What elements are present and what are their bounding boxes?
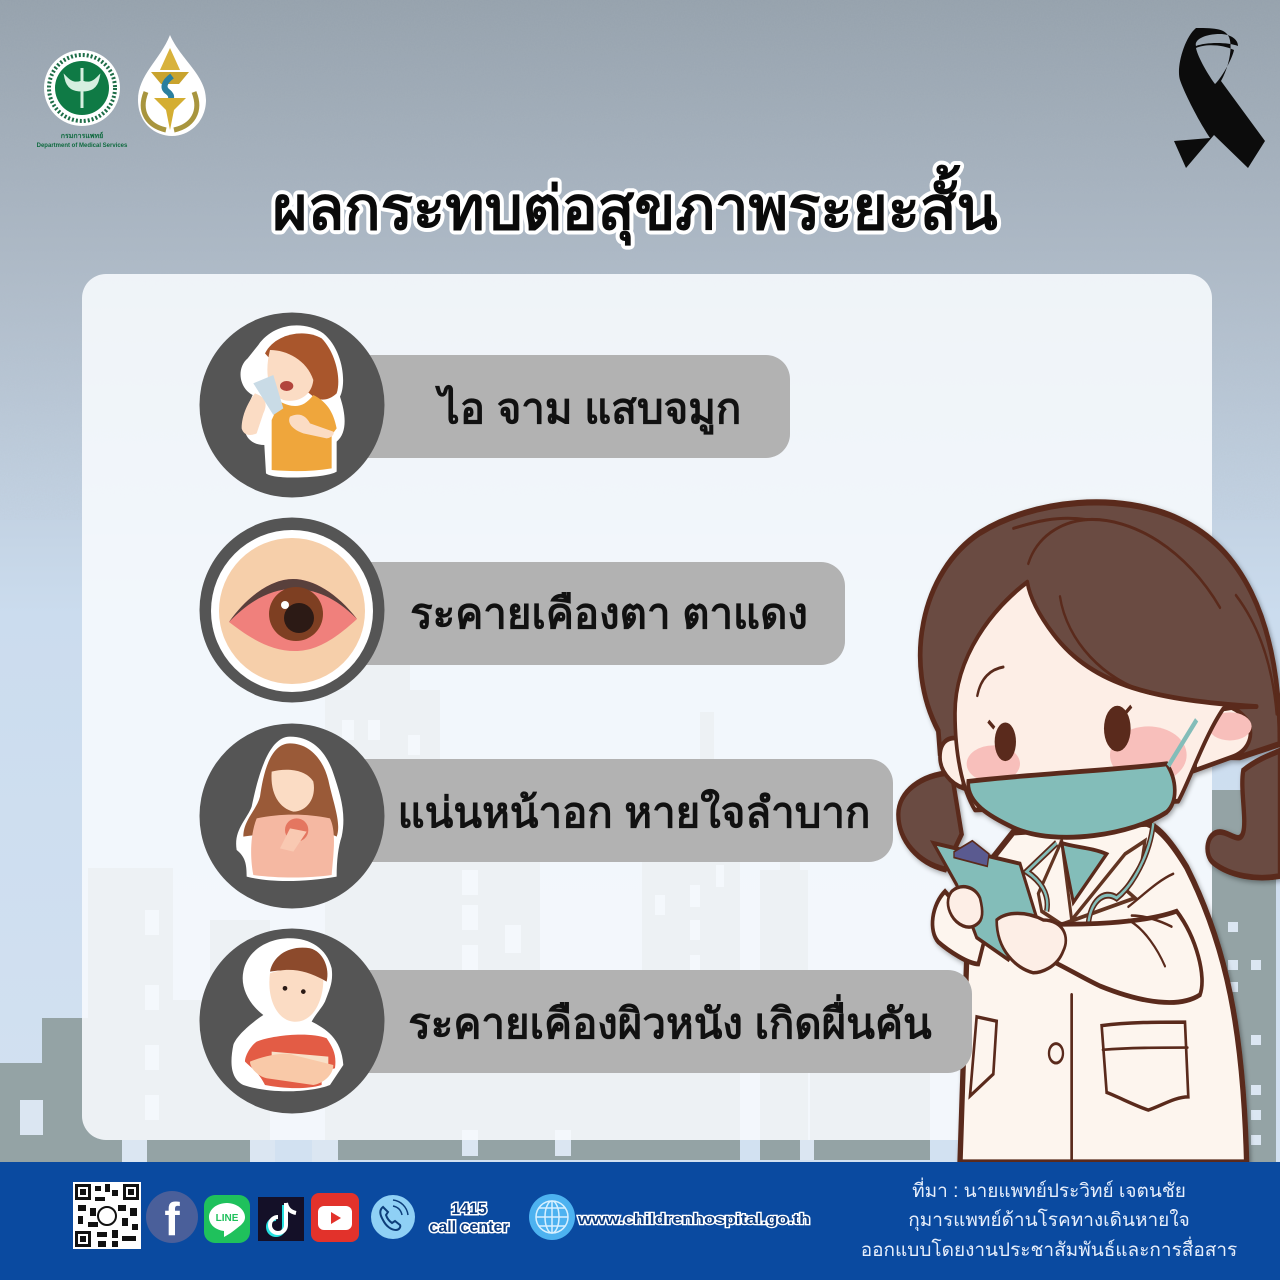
chest pain bbox=[285, 818, 308, 842]
row 4 bbox=[200, 928, 972, 1114]
sleeve folds bbox=[1128, 874, 1173, 966]
label: ไอ จาม แสบจมูก bbox=[435, 384, 741, 435]
face bbox=[267, 350, 313, 401]
left cuff and sleeve bbox=[933, 891, 985, 964]
stethoscope bbox=[1027, 823, 1153, 924]
badge bbox=[200, 518, 384, 702]
row 3 bbox=[200, 724, 893, 908]
icon: LINE bbox=[204, 1195, 250, 1243]
row 2 bbox=[200, 518, 845, 702]
right ear blush bbox=[1208, 712, 1252, 740]
icon: coughing girl bbox=[241, 325, 345, 478]
hair lines bbox=[977, 518, 1277, 714]
QR code bbox=[73, 1182, 141, 1249]
icon: woman with chest tightness bbox=[236, 737, 343, 881]
icon: TikTok bbox=[258, 1197, 304, 1241]
left hand bbox=[948, 887, 982, 927]
lapels bbox=[1038, 841, 1145, 924]
source credit: กุมารแพทย์ด้านโรคทางเดินหายใจ bbox=[908, 1208, 1190, 1232]
left coat pocket bbox=[970, 1017, 997, 1096]
icon: globe bbox=[529, 1194, 575, 1240]
hair bbox=[265, 333, 338, 400]
label: แน่นหน้าอก หายใจลำบาก bbox=[398, 788, 870, 836]
left ear bbox=[940, 738, 963, 788]
sticker border bbox=[236, 737, 343, 881]
right hand and cuff bbox=[997, 913, 1066, 973]
hair bbox=[243, 743, 338, 837]
title: ผลกระทบต่อสุขภาพระยะสั้น bbox=[272, 164, 998, 246]
coat pocket bbox=[1102, 1022, 1188, 1110]
black ribbon bbox=[1174, 28, 1265, 168]
footer band bbox=[0, 1162, 1280, 1280]
call center label: 1415 bbox=[451, 1201, 487, 1218]
hand on chest bbox=[289, 415, 334, 438]
right pigtail bbox=[1207, 751, 1280, 878]
right ear bbox=[1195, 704, 1250, 770]
back hair bbox=[920, 502, 1280, 757]
badge bbox=[200, 928, 384, 1114]
hand bbox=[280, 828, 307, 852]
logo: Department of Medical Services drop bbox=[138, 35, 206, 136]
tissue bbox=[253, 375, 283, 415]
eyes bbox=[283, 986, 306, 994]
label: ระคายเคืองผิวหนัง เกิดผื่นคัน bbox=[408, 994, 932, 1047]
shirt bbox=[245, 1035, 335, 1088]
mask strap bbox=[1168, 720, 1197, 766]
icon: phone bbox=[371, 1195, 415, 1239]
label: ระคายเคืองตา ตาแดง bbox=[410, 590, 808, 637]
arm bbox=[242, 393, 266, 435]
sticker border bbox=[241, 325, 345, 478]
coat button bbox=[1049, 1044, 1063, 1063]
face mask bbox=[968, 764, 1175, 837]
clipboard bbox=[933, 843, 1036, 960]
badge bbox=[200, 724, 384, 908]
coat center seam bbox=[1068, 995, 1076, 1162]
icon: LINE: LINE bbox=[216, 1213, 239, 1224]
content panel bbox=[82, 274, 1212, 1140]
icon: Facebook bbox=[146, 1191, 198, 1245]
hair bbox=[270, 948, 328, 982]
pill bbox=[320, 355, 790, 458]
face bbox=[271, 770, 314, 812]
city skyline bbox=[0, 665, 1276, 1170]
left pigtail bbox=[898, 773, 962, 869]
call center label: call center bbox=[429, 1219, 509, 1236]
row 1 bbox=[200, 312, 790, 498]
pill bbox=[320, 562, 845, 665]
face bbox=[269, 970, 323, 1022]
coat body bbox=[937, 823, 1247, 1163]
shirt bbox=[272, 395, 337, 471]
eyes bbox=[988, 706, 1131, 761]
pocket flap line bbox=[1103, 1048, 1188, 1050]
sticker border bbox=[231, 938, 343, 1091]
collar and scrub bbox=[1062, 843, 1107, 902]
source credit bbox=[861, 1177, 1237, 1261]
logo: Ministry of Public Health: Department of Medical Services bbox=[37, 143, 128, 149]
clipboard clip bbox=[954, 841, 989, 866]
source credit: ที่มา : นายแพทย์ประวิทย์ เจตนชัย bbox=[912, 1177, 1186, 1202]
body bbox=[251, 815, 334, 877]
cheeks bbox=[967, 726, 1187, 784]
doctor illustration bbox=[898, 502, 1280, 1163]
source credit: ออกแบบโดยงานประชาสัมพันธ์และการสื่อสาร bbox=[861, 1236, 1237, 1261]
icon: red eye bbox=[211, 530, 373, 692]
icon: Facebook: f bbox=[164, 1193, 180, 1245]
call center label bbox=[429, 1201, 509, 1236]
website: www.childrenhospital.go.th bbox=[577, 1212, 810, 1228]
icon: boy with rash bbox=[231, 938, 343, 1091]
shirt stripe bbox=[272, 1052, 328, 1065]
pill bbox=[320, 759, 893, 862]
pill bbox=[320, 970, 972, 1073]
face bbox=[955, 582, 1257, 810]
logo: Ministry of Public Health bbox=[37, 50, 128, 149]
icon: YouTube bbox=[311, 1193, 359, 1242]
logo: Ministry of Public Health: กรมการแพทย์ bbox=[61, 131, 103, 140]
arm bbox=[250, 1054, 333, 1085]
mouth bbox=[280, 381, 293, 391]
badge bbox=[200, 312, 384, 498]
right arm sleeve bbox=[1037, 911, 1202, 1002]
